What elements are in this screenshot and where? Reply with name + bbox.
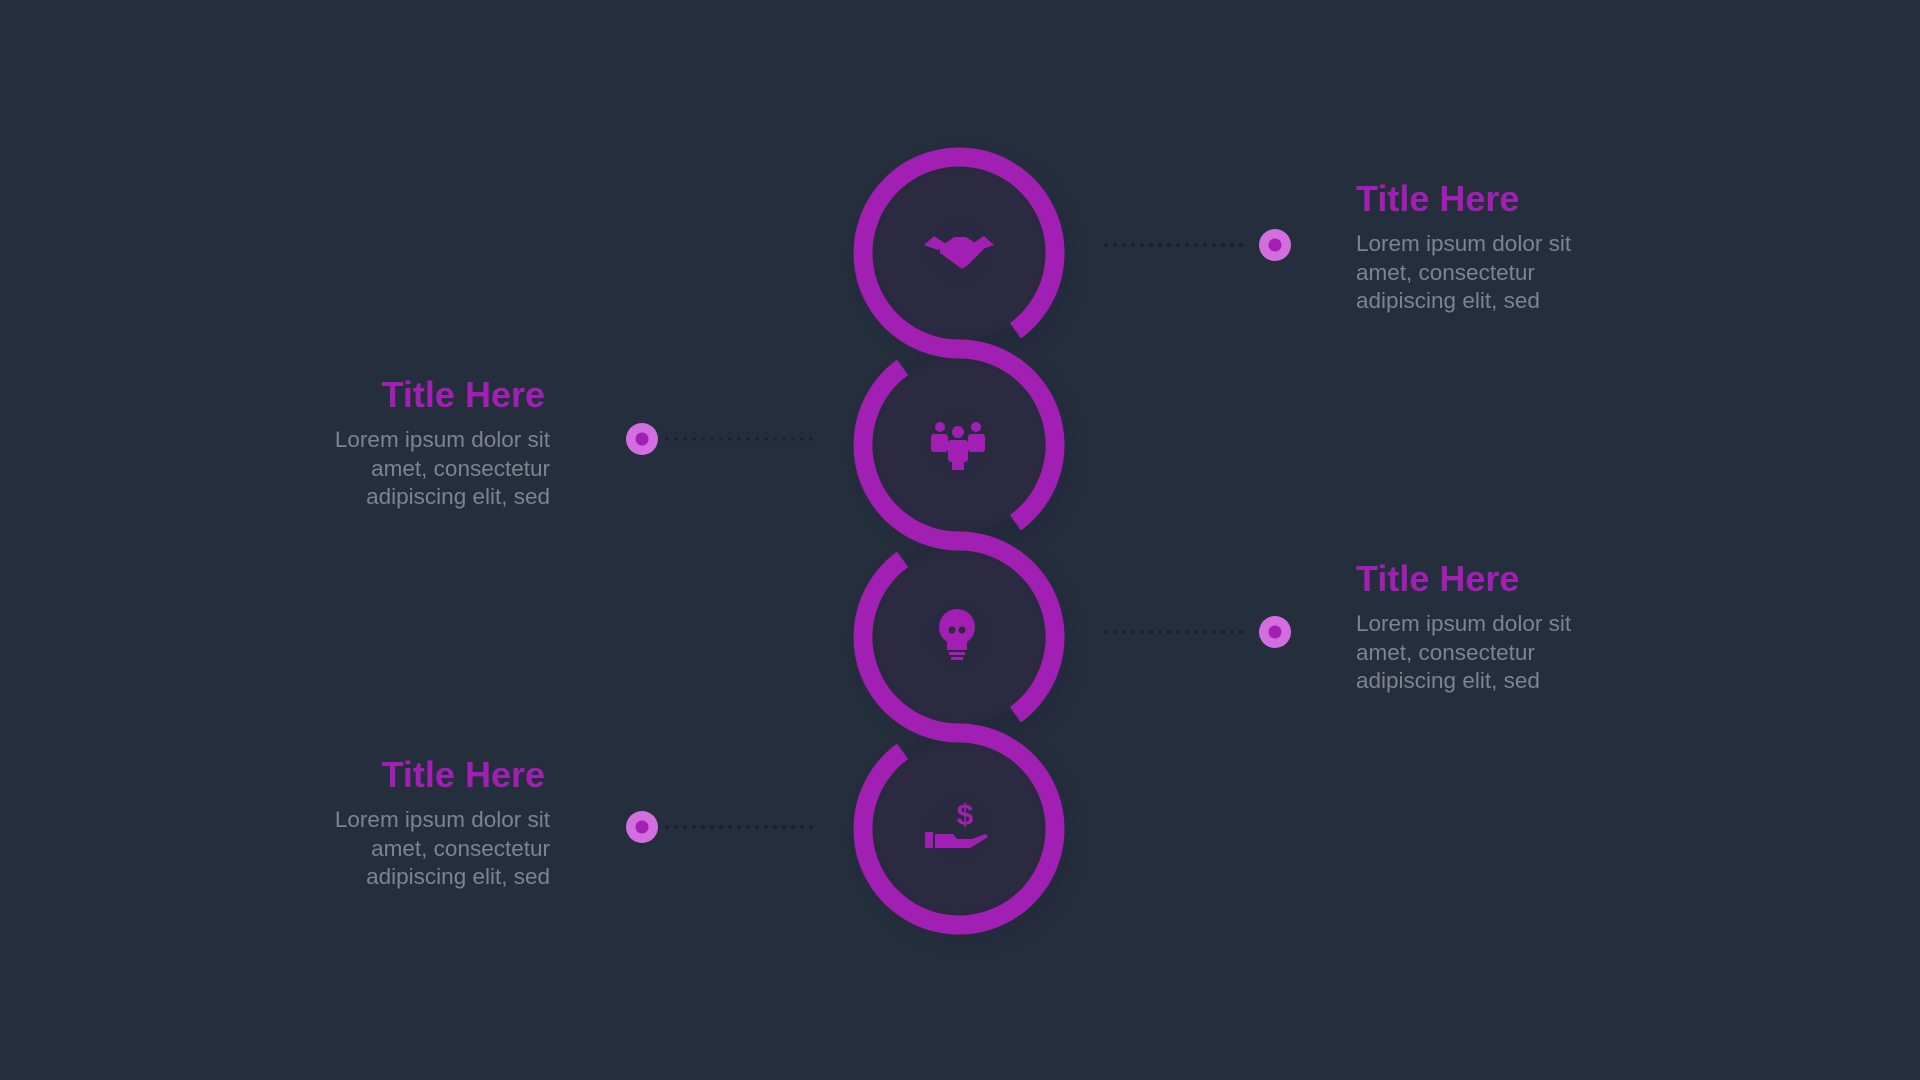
text block: right 1: Title Here	[1356, 178, 1519, 219]
text block: right 1: adipiscing elit, sed	[1356, 288, 1540, 313]
icon: handshake	[924, 236, 994, 269]
icon: team	[931, 422, 985, 470]
icon: lightbulb	[939, 609, 975, 660]
text block: left 2: amet, consectetur	[371, 836, 550, 860]
text block: right 1: Lorem ipsum dolor sit	[1356, 231, 1571, 256]
text block: left 2	[335, 754, 550, 889]
text block: left 2: adipiscing elit, sed	[366, 864, 550, 889]
text block: right 2: Lorem ipsum dolor sit	[1356, 611, 1571, 636]
text block: left 1: adipiscing elit, sed	[366, 484, 550, 509]
text block: left 1: Lorem ipsum dolor sit	[335, 427, 550, 452]
marker dots	[626, 229, 1291, 843]
purple rings	[863, 157, 1055, 925]
icon: dollar hand	[925, 799, 988, 848]
text block: left 1	[335, 374, 550, 509]
text block: left 2: Title Here	[382, 754, 545, 795]
icon: dollar hand: $	[957, 799, 974, 832]
text block: right 1	[1356, 178, 1571, 313]
shadows	[863, 157, 1071, 941]
text block: right 2: Title Here	[1356, 558, 1519, 599]
text block: right 2: adipiscing elit, sed	[1356, 668, 1540, 693]
text block: left 1: Title Here	[382, 374, 545, 415]
text block: right 2: amet, consectetur	[1356, 640, 1535, 664]
text block: right 2	[1356, 558, 1571, 693]
text block: left 2: Lorem ipsum dolor sit	[335, 807, 550, 832]
text block: right 1: amet, consectetur	[1356, 260, 1535, 284]
connectors	[667, 245, 1249, 827]
text block: left 1: amet, consectetur	[371, 456, 550, 480]
inner discs	[871, 165, 1047, 917]
